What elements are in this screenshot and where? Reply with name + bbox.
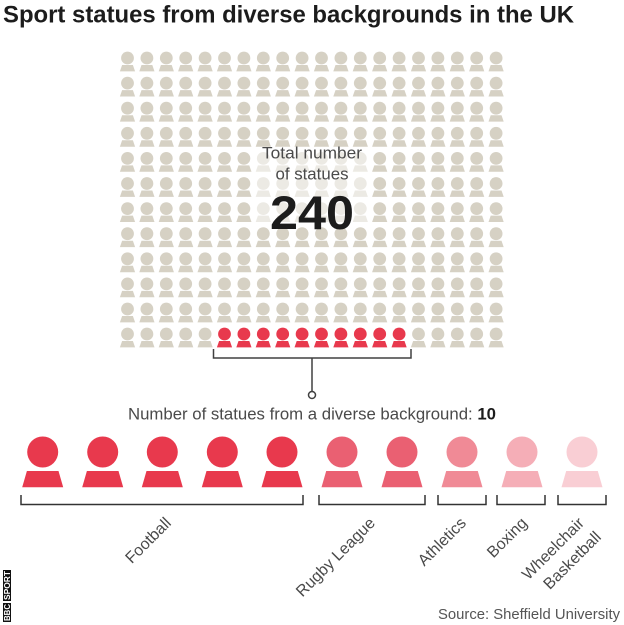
sport labels: Basketball (541, 529, 605, 593)
sport labels: Wheelchair (519, 514, 588, 583)
large figures by sport (22, 436, 602, 487)
bracket and leader to diverse count (214, 349, 411, 398)
sport labels: Rugby League (293, 515, 379, 600)
sport labels: Boxing (484, 515, 531, 561)
sport brackets (21, 495, 606, 504)
sport labels (123, 514, 605, 600)
total label (262, 144, 363, 239)
pictogram grid: 240 statues (120, 52, 504, 347)
total label: Total number (262, 144, 363, 162)
BBC Sport logo: BBC (3, 604, 12, 621)
BBC Sport logo: SPORT (3, 571, 12, 600)
sport labels: Athletics (415, 515, 470, 570)
title: Sport statues from diverse backgrounds in the UK (3, 2, 575, 28)
sport labels: Football (123, 515, 175, 567)
diverse count label: Number of statues from a diverse background: 10 (128, 404, 496, 424)
total label: 240 (270, 186, 354, 239)
total label: of statues (276, 166, 348, 184)
source: Source: Sheffield University (438, 606, 620, 623)
BBC Sport logo (3, 570, 12, 622)
